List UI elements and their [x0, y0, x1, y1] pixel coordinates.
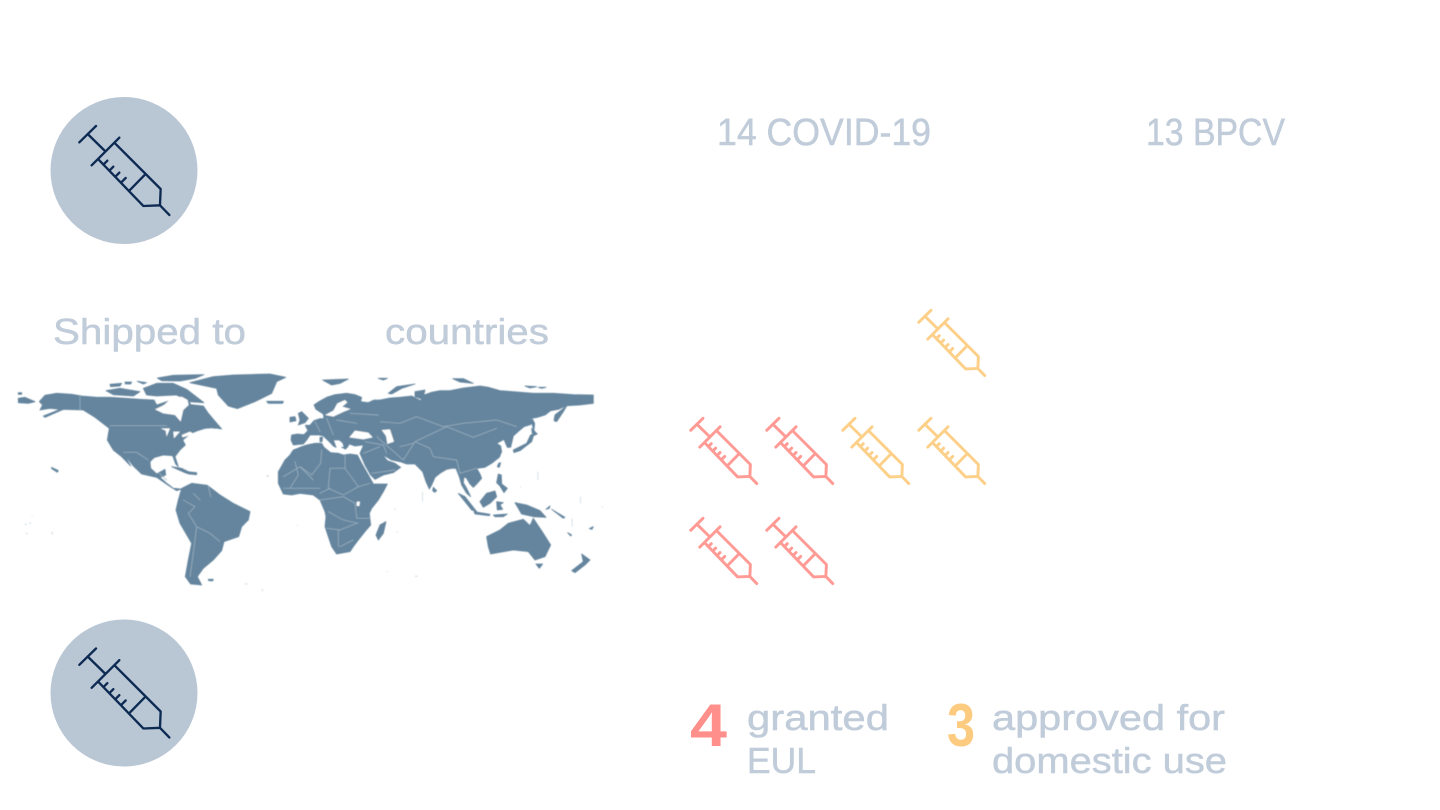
icon: yellow syringe 3 [919, 418, 985, 484]
icon: red syringe 3 [691, 518, 757, 584]
heading: 13 BPCV: 13 BPCV [1146, 112, 1286, 154]
icon: red syringe 4 [767, 518, 833, 584]
stat: 4 granted EUL: 4 [690, 692, 728, 759]
stat: 4 granted EUL: granted [747, 697, 889, 738]
stat: 4 granted EUL: EUL [747, 740, 816, 781]
stat: 3 approved for domestic use [947, 692, 1227, 781]
heading: countries: countries [385, 311, 549, 352]
stat: 3 approved for domestic use: approved for [992, 697, 1225, 738]
icon: syringe badge top [50, 97, 198, 244]
heading: 14 COVID-19: 14 COVID-19 [717, 112, 931, 154]
icon: yellow syringe single [919, 310, 985, 376]
icon: syringe badge bottom [50, 620, 198, 766]
icon: red syringe 2 [767, 418, 833, 484]
stat: 3 approved for domestic use: 3 [947, 692, 975, 759]
stat: 3 approved for domestic use: domestic use [992, 740, 1227, 781]
icon: red syringe 1 [691, 418, 757, 484]
stat: 4 granted EUL [690, 692, 889, 781]
world map [18, 374, 603, 591]
heading: shipped to: Shipped to [53, 311, 246, 352]
icon: yellow syringe 2 [843, 418, 909, 484]
